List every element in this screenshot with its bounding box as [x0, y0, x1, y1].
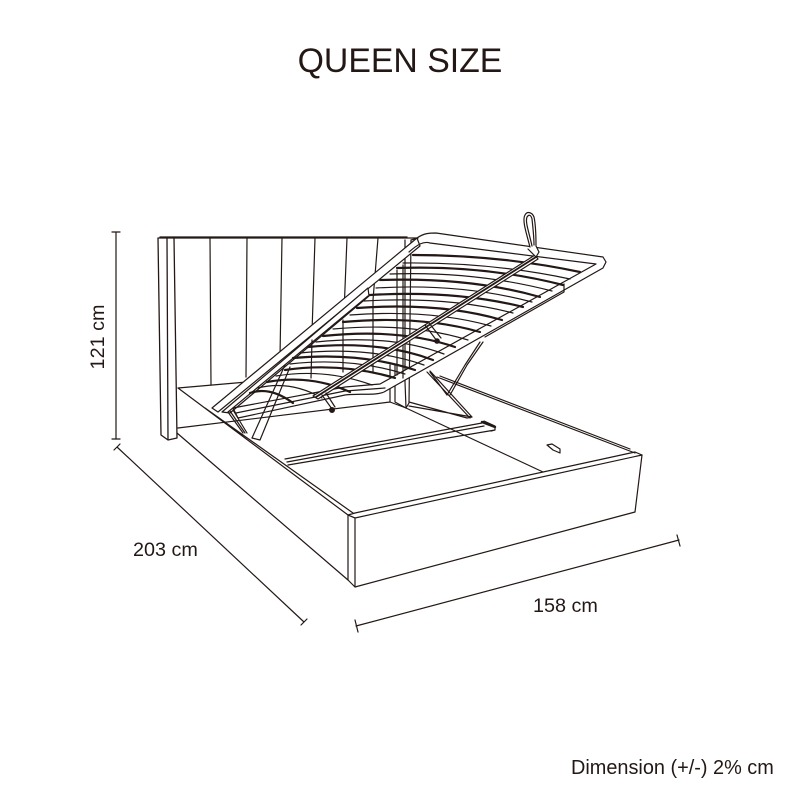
center support bar	[285, 421, 495, 465]
handle on base	[547, 444, 560, 453]
label: length: 203 cm	[133, 539, 198, 561]
dimension: length	[114, 444, 307, 625]
slats	[250, 255, 580, 403]
lifted lid frame	[212, 233, 606, 418]
dimension: width	[355, 535, 680, 632]
lift struts	[228, 323, 483, 440]
label: height: 121 cm	[87, 305, 109, 369]
headboard	[158, 237, 418, 440]
bed base	[177, 376, 642, 587]
dimension: height	[87, 232, 120, 439]
tolerance note: Dimension (+/-) 2% cm	[571, 757, 774, 779]
lid loop handle	[524, 213, 539, 257]
label: width: 158 cm	[533, 595, 598, 617]
lid cross bar	[313, 255, 538, 399]
title: QUEEN SIZE	[298, 42, 502, 80]
